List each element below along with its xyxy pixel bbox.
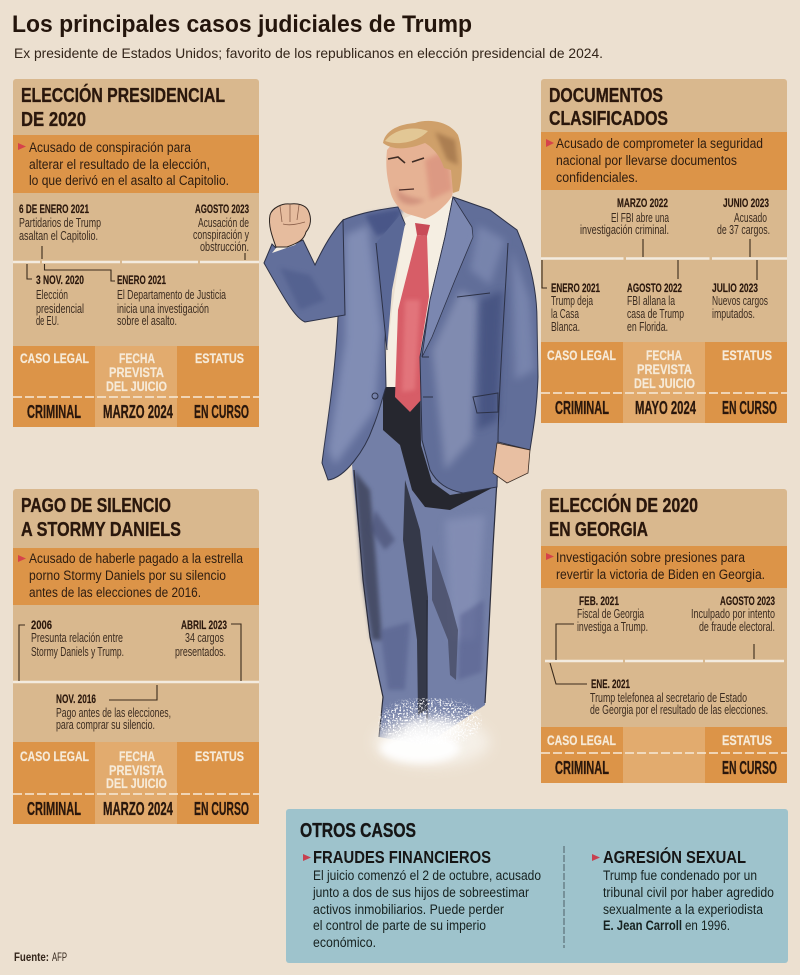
summary band (13, 548, 259, 605)
status table (13, 742, 259, 824)
status table: ESTATUS (722, 733, 772, 748)
case: fraudes financieros (303, 847, 541, 950)
panel: pago de silencio a Stormy Daniels (13, 489, 259, 824)
status table (13, 346, 259, 427)
heading: A STORMY DANIELS (21, 519, 181, 541)
timeline: ENERO 2021 (551, 281, 600, 295)
timeline: AGOSTO 2022 (627, 281, 682, 295)
summary band: Acusado de haberle pagado a la estrella (29, 551, 243, 566)
status table: CASO LEGAL (547, 348, 616, 363)
status table: PREVISTA (109, 365, 164, 380)
status table: ESTATUS (195, 749, 244, 764)
heading: EN GEORGIA (549, 519, 648, 541)
heading (21, 495, 181, 541)
timeline: en Florida. (627, 320, 668, 334)
summary band: antes de las elecciones de 2016. (29, 585, 201, 600)
timeline: MARZO 2022 (617, 196, 668, 210)
status table: MAYO 2024 (635, 397, 696, 418)
source note: AFP (52, 950, 67, 964)
summary band: Acusado de conspiración para (29, 140, 191, 155)
timeline (13, 618, 259, 732)
timeline: Elección (36, 288, 68, 302)
summary band: lo que derivó en el asalto al Capitolio. (29, 173, 229, 188)
timeline: El FBI abre una (611, 211, 669, 225)
timeline: la Casa (551, 307, 579, 321)
shirt (383, 197, 453, 387)
status table: CASO LEGAL (547, 733, 616, 748)
status table: MARZO 2024 (103, 401, 173, 422)
timeline: ABRIL 2023 (181, 618, 227, 632)
timeline: AGOSTO 2023 (195, 202, 249, 216)
heading: ELECCIÓN DE 2020 (549, 493, 698, 517)
snow at feet (374, 698, 490, 766)
summary band: porno Stormy Daniels por su silencio (29, 568, 226, 583)
summary band: revertir la victoria de Biden en Georgia. (556, 567, 765, 582)
status table: DEL JUICIO (106, 379, 167, 394)
status table: CASO LEGAL (20, 351, 89, 366)
timeline: FBI allana la (627, 294, 675, 308)
heading: ELECCIÓN PRESIDENCIAL (21, 83, 225, 107)
timeline: Stormy Daniels y Trump. (31, 645, 124, 659)
timeline: JULIO 2023 (712, 281, 758, 295)
heading: OTROS CASOS (300, 820, 416, 842)
case: agresión sexual: en 1996. (685, 918, 730, 933)
summary band: nacional por llevarse documentos (556, 153, 737, 168)
timeline: 3 NOV. 2020 (36, 273, 84, 287)
heading (549, 85, 668, 130)
case: agresión sexual: tribunal civil por haber agredido (603, 885, 774, 900)
heading: PAGO DE SILENCIO (21, 495, 171, 517)
timeline: AGOSTO 2023 (720, 594, 775, 608)
timeline: Acusado (734, 211, 767, 225)
case: agresión sexual: Trump fue condenado por un (603, 868, 757, 883)
status table: DEL JUICIO (634, 376, 695, 391)
timeline (545, 594, 784, 717)
status table: ESTATUS (722, 348, 772, 363)
status table: EN CURSO (194, 798, 249, 819)
raised sleeve (264, 220, 345, 322)
timeline: Nuevos cargos (712, 294, 768, 308)
fist (269, 204, 310, 247)
status table: CRIMINAL (555, 757, 609, 778)
case: fraudes financieros: junto a dos de sus hijos de sobreestimar (312, 885, 529, 900)
head (383, 121, 462, 219)
case: agresión sexual: AGRESIÓN SEXUAL (603, 846, 746, 867)
case: fraudes financieros: el control de parte de su imperio (313, 918, 486, 933)
timeline: FEB. 2021 (579, 594, 619, 608)
jacket (322, 197, 538, 493)
status table: PREVISTA (109, 763, 164, 778)
timeline: Blanca. (551, 320, 580, 334)
timeline (541, 196, 787, 334)
status table: ESTATUS (195, 351, 244, 366)
timeline: 2006 (31, 618, 52, 632)
right hand (493, 443, 530, 483)
panel: elección de 2020 en Georgia (541, 489, 787, 783)
status table: PREVISTA (637, 362, 692, 377)
case: fraudes financieros: FRAUDES FINANCIEROS (313, 847, 491, 867)
summary band (541, 546, 787, 588)
timeline: investigación criminal. (580, 223, 669, 237)
summary band: Acusado de comprometer la seguridad (556, 136, 763, 151)
summary band (13, 135, 259, 193)
timeline: JUNIO 2023 (723, 196, 769, 210)
status table: EN CURSO (194, 401, 249, 422)
timeline: El Departamento de Justicia (117, 288, 226, 302)
case: agresión sexual (592, 846, 774, 933)
status table (541, 342, 787, 423)
status table: FECHA (646, 348, 682, 363)
summary band: confidenciales. (556, 170, 638, 185)
status table: CASO LEGAL (20, 749, 89, 764)
source note: Fuente: (14, 950, 49, 964)
timeline: presidencial (36, 302, 84, 316)
status table: FECHA (119, 351, 155, 366)
timeline: conspiración y (193, 228, 250, 242)
trousers (352, 385, 497, 745)
status table: FECHA (119, 749, 155, 764)
heading: DE 2020 (21, 109, 86, 131)
case: fraudes financieros: El juicio comenzó el 2 de octubre, acusado (313, 868, 541, 883)
timeline: Pago antes de las elecciones, (56, 706, 171, 720)
summary band: Investigación sobre presiones para (556, 550, 745, 565)
tie (395, 223, 430, 412)
timeline: de EU. (36, 314, 59, 328)
timeline: casa de Trump (627, 307, 684, 321)
panel: elección presidencial de 2020 (13, 79, 259, 427)
status table: CRIMINAL (27, 401, 81, 422)
case: fraudes financieros: económico. (313, 935, 376, 950)
case: agresión sexual: sexualmente a la experiodista (603, 902, 763, 917)
timeline: Presunta relación entre (31, 631, 123, 645)
case: fraudes financieros: activos inmobiliarios. Puede perder (313, 902, 504, 917)
timeline: ENERO 2021 (117, 273, 166, 287)
status table: DEL JUICIO (106, 776, 167, 791)
timeline: para comprar su silencio. (56, 718, 155, 732)
timeline: sobre el asalto. (117, 314, 177, 328)
title: Los principales casos judiciales de Trump (12, 11, 472, 38)
timeline: ENE. 2021 (591, 677, 630, 691)
case: agresión sexual: E. Jean Carroll (603, 918, 682, 933)
timeline (13, 202, 259, 328)
summary band (541, 132, 787, 190)
heading: CLASIFICADOS (549, 108, 668, 130)
timeline: presentados. (175, 645, 226, 659)
summary band: alterar el resultado de la elección, (29, 157, 210, 172)
timeline: de 37 cargos. (717, 223, 770, 237)
timeline: 34 cargos (185, 631, 224, 645)
heading: DOCUMENTOS (549, 85, 663, 107)
timeline: investiga a Trump. (577, 620, 648, 634)
timeline: obstrucción. (200, 240, 249, 254)
status table: CRIMINAL (27, 798, 81, 819)
status table: CRIMINAL (555, 397, 609, 418)
timeline: NOV. 2016 (56, 692, 96, 706)
timeline: asaltan el Capitolio. (19, 229, 98, 243)
heading (549, 493, 698, 541)
status table (541, 727, 787, 783)
illustration: Trump figure (264, 121, 538, 766)
timeline: Acusación de (198, 216, 249, 230)
timeline: Fiscal de Georgia (577, 607, 644, 621)
timeline: Partidarios de Trump (19, 216, 101, 230)
timeline: inicia una investigación (117, 302, 209, 316)
timeline: Trump deja (551, 294, 593, 308)
status table: MARZO 2024 (103, 798, 173, 819)
panel: otros casos (286, 809, 788, 963)
timeline: 6 DE ENERO 2021 (19, 202, 89, 216)
subtitle: Ex presidente de Estados Unidos; favorito de los republicanos en elección presidencial de 2024. (14, 45, 603, 61)
panel: documentos clasificados (541, 79, 787, 423)
heading (21, 83, 225, 131)
timeline: imputados. (712, 307, 755, 321)
